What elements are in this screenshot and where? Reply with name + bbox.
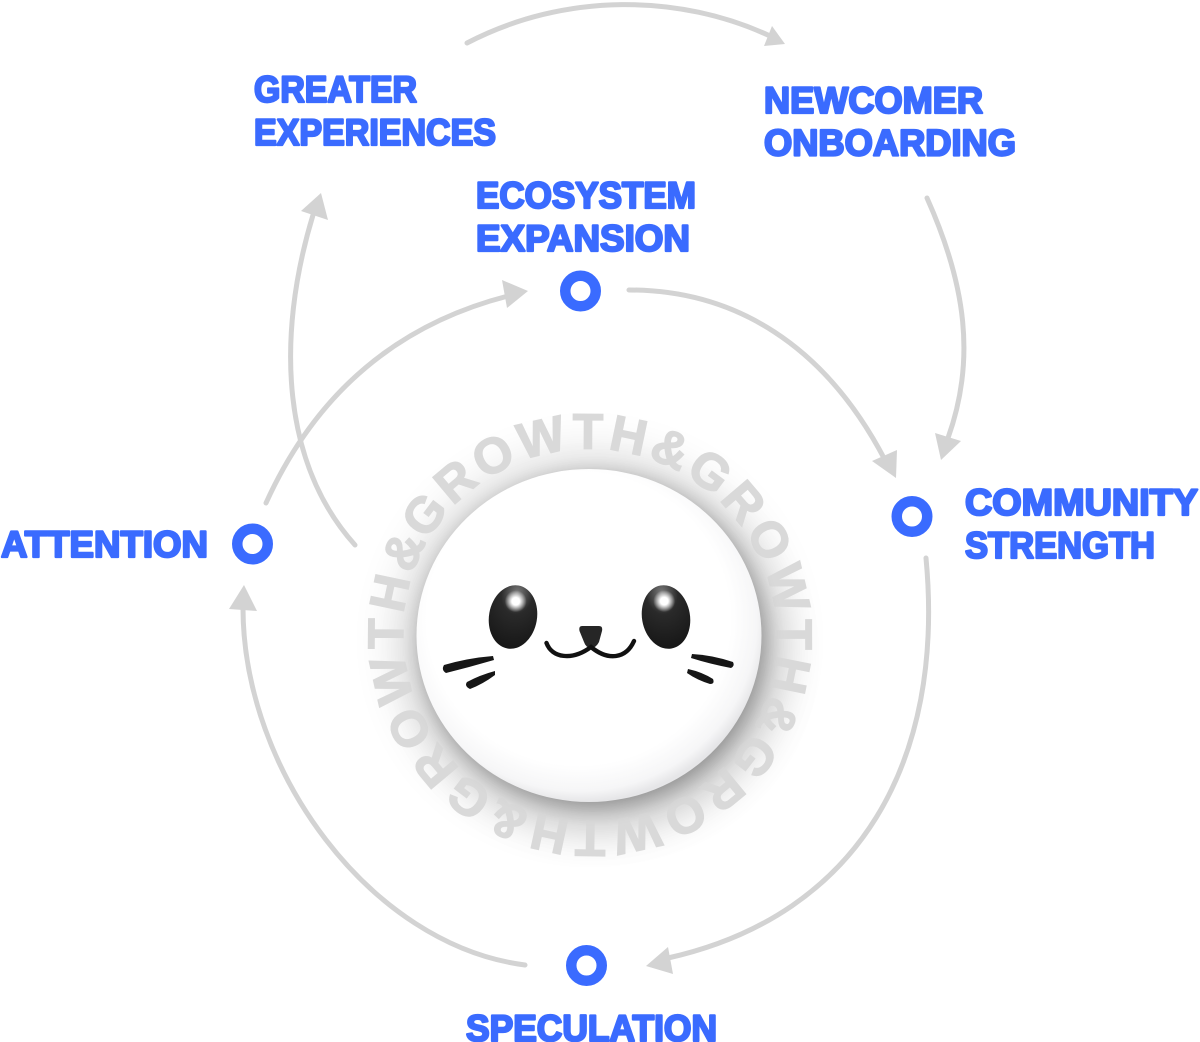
arrow: newcomer onboarding to community strength [927, 198, 964, 460]
right whiskers [687, 654, 734, 684]
mouth [546, 641, 634, 656]
node: community strength [897, 482, 1198, 566]
label: attention: ATTENTION [1, 524, 208, 565]
label: community strength: COMMUNITY [965, 482, 1198, 523]
left whiskers [443, 656, 495, 689]
left eye [484, 581, 542, 653]
label: ecosystem expansion: ECOSYSTEM [476, 175, 696, 216]
button body [416, 469, 762, 802]
seal face button [416, 469, 766, 808]
arrow: community strength to speculation [646, 558, 929, 974]
label: ecosystem expansion: EXPANSION [476, 218, 690, 259]
button drop shadow [398, 454, 782, 826]
node: attention [1, 524, 268, 565]
nose [579, 626, 602, 648]
label: newcomer onboarding: NEWCOMER [764, 80, 983, 121]
label: newcomer onboarding: ONBOARDING [764, 122, 1016, 164]
button contact shadow [420, 474, 766, 808]
arrow: attention to ecosystem expansion [266, 280, 528, 503]
node: speculation [466, 950, 717, 1042]
label: community strength: STRENGTH [965, 525, 1155, 566]
node: ecosystem expansion [476, 175, 696, 306]
arrow: ecosystem expansion to community strength [629, 290, 897, 478]
arrow: speculation to attention [229, 585, 525, 965]
arrow: greater experiences to newcomer onboarding [467, 5, 785, 46]
label: greater experiences: GREATER [254, 69, 417, 110]
arrow: attention to greater experiences [291, 193, 355, 545]
right eye [637, 581, 695, 653]
label: greater experiences: EXPERIENCES [254, 112, 496, 153]
circular text ring: GROWTH&GROWTH&GROWTH&GROWTH& [368, 414, 812, 857]
